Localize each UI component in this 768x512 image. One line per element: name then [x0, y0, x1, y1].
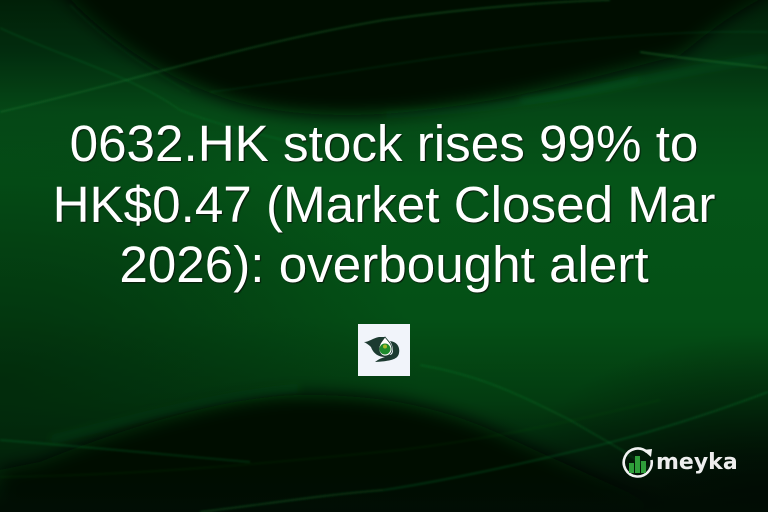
- dark top lens: [40, 0, 768, 115]
- icon: company logo: [358, 324, 410, 376]
- dark bottom lens: [0, 395, 670, 512]
- icon: meyka circle with bars: [622, 447, 654, 478]
- wordmark: meyka: [656, 450, 738, 475]
- title: HK$0.47 (Market Closed Mar: [53, 176, 715, 233]
- title: 0632.HK stock rises 99% to: [70, 115, 698, 172]
- title: [53, 115, 716, 294]
- logo: meyka brand: [622, 447, 738, 478]
- title: 2026): overbought alert: [119, 236, 649, 293]
